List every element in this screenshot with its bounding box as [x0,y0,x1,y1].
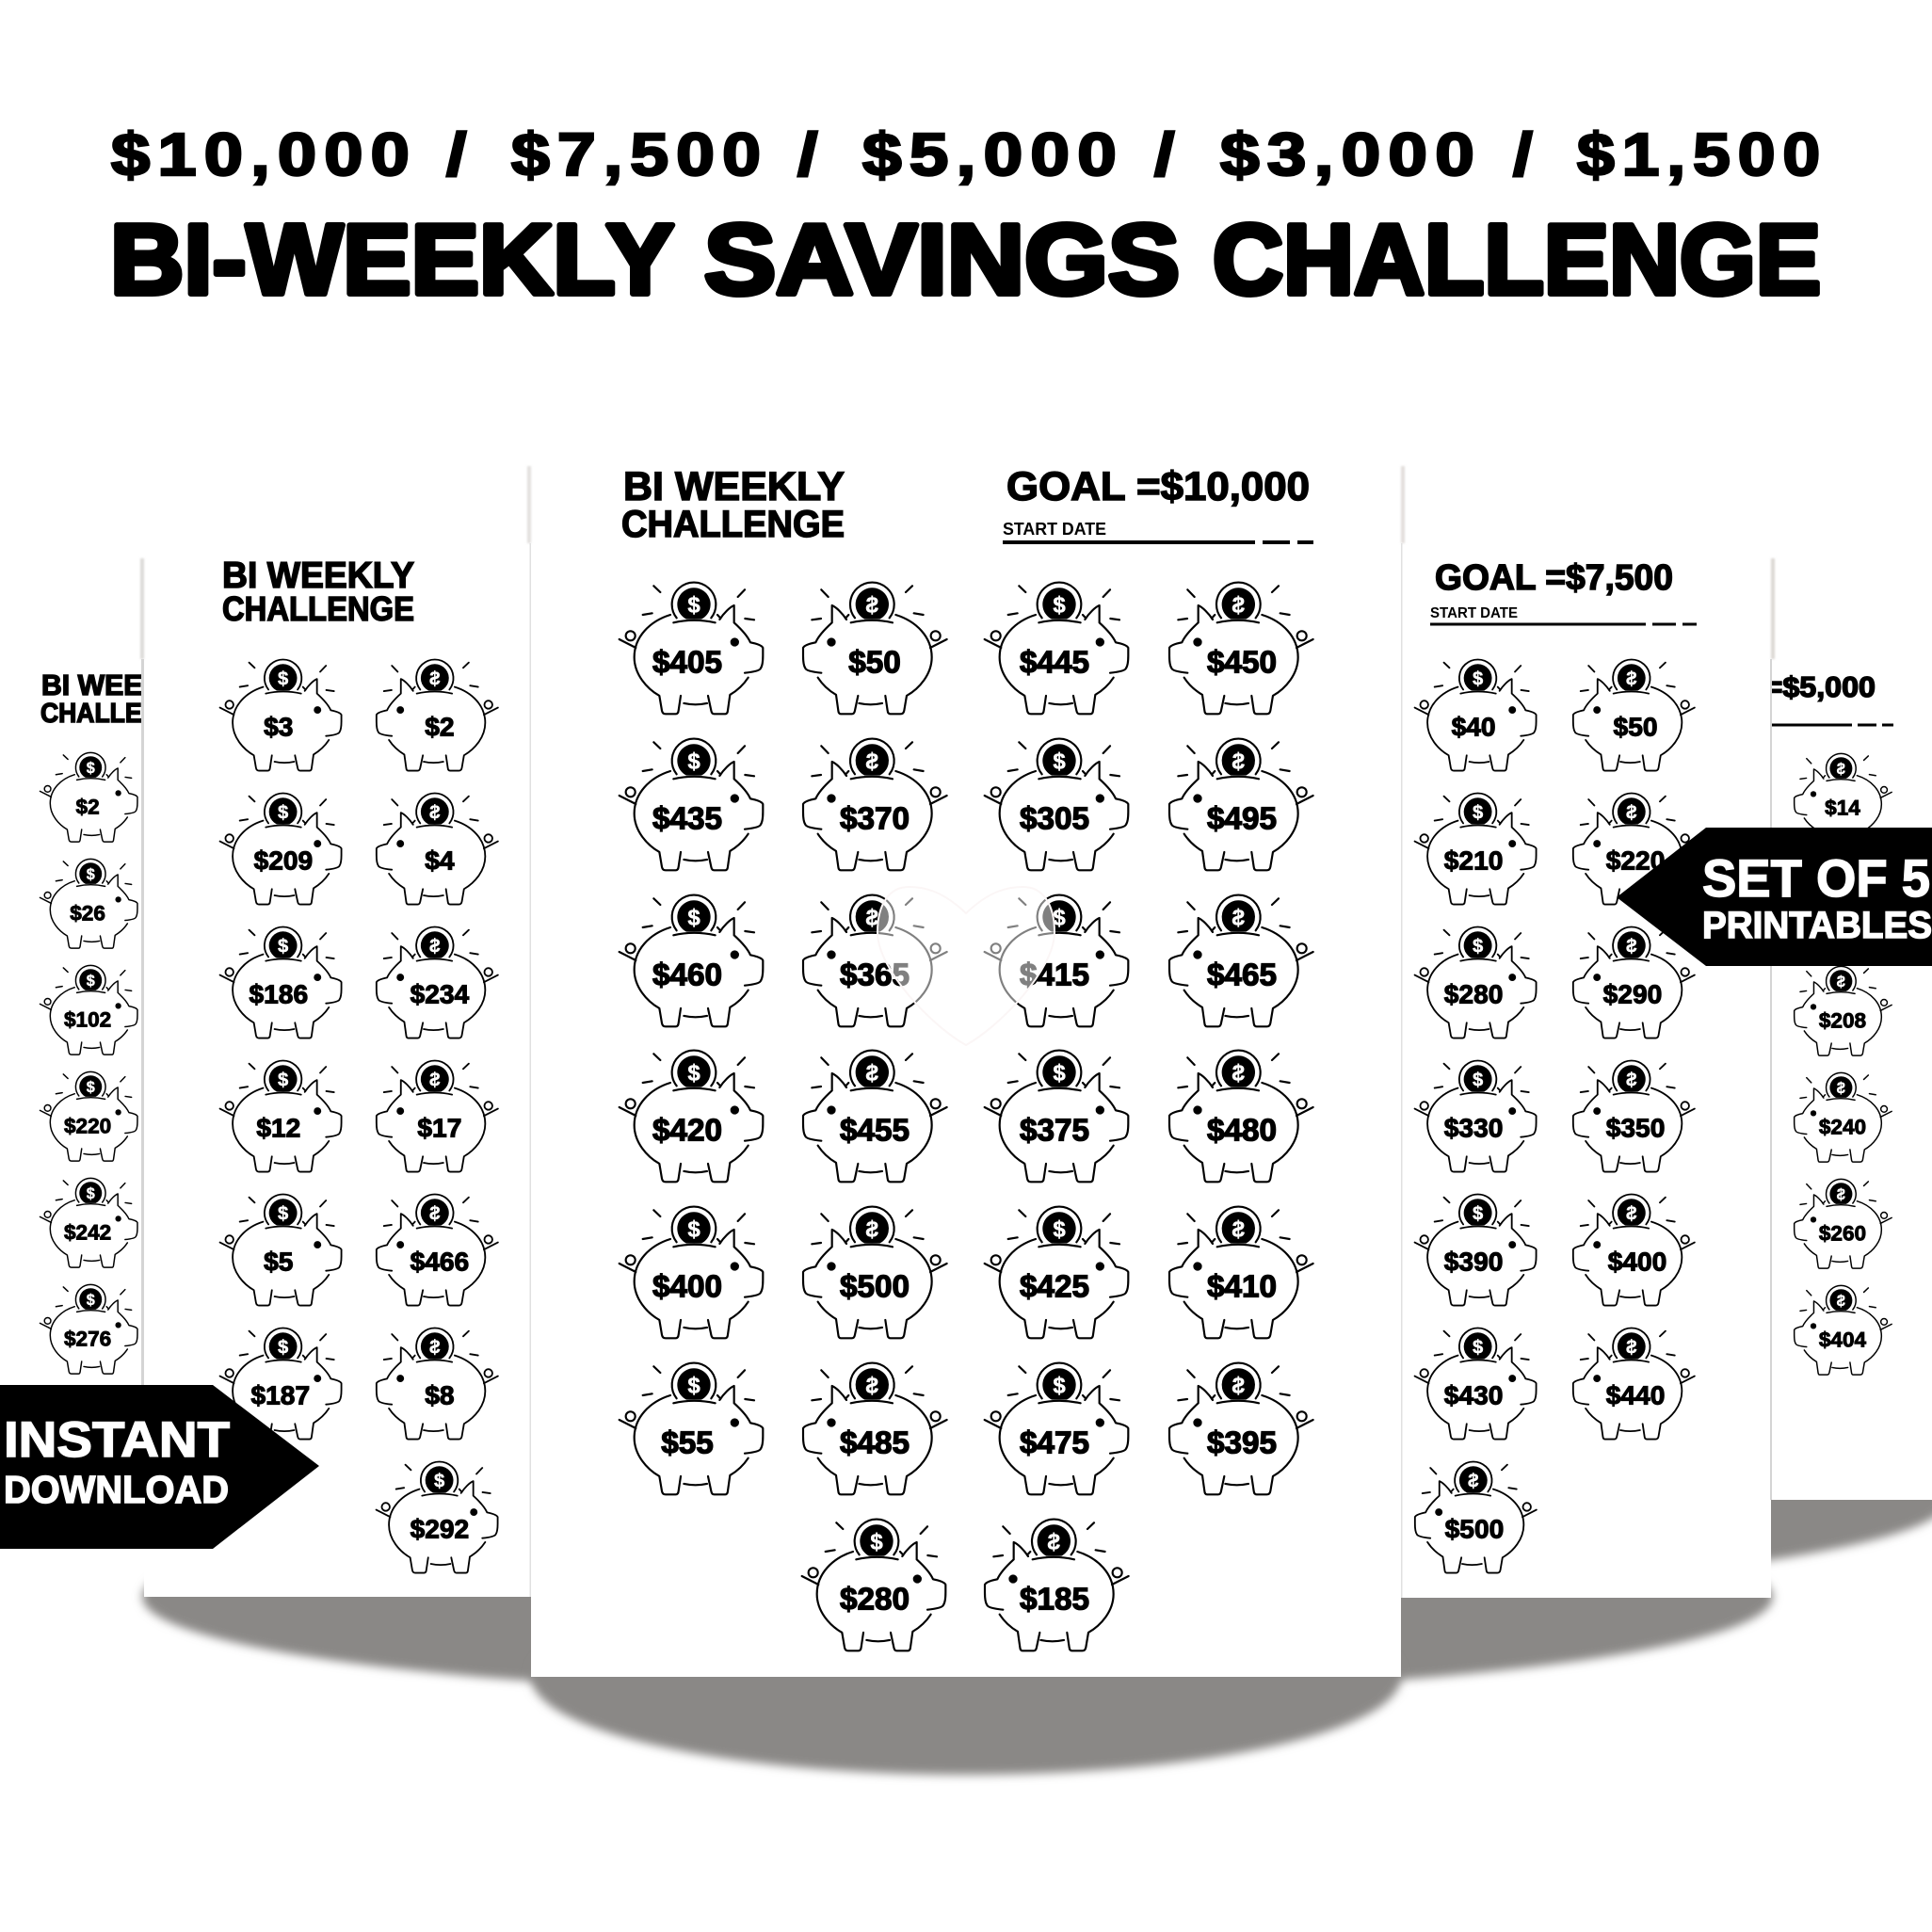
piggy $435: $435 [652,801,722,836]
piggy $365: $365 [840,958,910,992]
piggy $425 [985,1207,1128,1338]
piggy $102 [40,965,137,1055]
piggy $480 [1169,1051,1313,1182]
piggy $365 [803,895,947,1026]
rear left heading: CHALLENGE [40,699,196,729]
piggy $55: $55 [661,1426,714,1461]
piggy $415 [985,895,1128,1026]
title: BI-WEEKLY [110,204,674,315]
piggy $8: $8 [425,1381,455,1410]
panel: front sheet ($10,000) [527,464,1405,1677]
watermark: translucent heart [877,887,1055,1045]
piggy $40 [1415,659,1537,771]
piggy $404: $404 [1819,1328,1867,1352]
piggy $390: $390 [1444,1248,1503,1277]
piggy $50 [1573,659,1695,771]
piggy $220 [40,1071,137,1161]
piggy $17 [377,1060,498,1172]
front goal heading: GOAL =$10,000 [1006,464,1310,509]
piggy $26 [40,859,137,948]
piggy $495: $495 [1207,801,1277,836]
piggy $40: $40 [1452,713,1496,742]
piggy $292: $292 [411,1515,469,1544]
piggy $242: $242 [64,1221,111,1245]
piggy $410 [1169,1207,1313,1338]
piggy $55 [620,1363,763,1494]
piggy $420 [620,1051,763,1182]
piggy $8 [377,1328,498,1440]
piggy $220 [1573,793,1695,905]
piggy $209 [220,793,342,905]
shadow: middle sheets [142,1498,1773,1696]
piggy $102: $102 [64,1008,111,1032]
banner text: set of 5: SET OF 5 [1702,848,1930,908]
piggy $50: $50 [848,646,901,681]
piggy $280 [802,1520,945,1650]
piggy $208 [1795,966,1892,1055]
piggy $430 [1415,1328,1537,1440]
title: SAVINGS [704,204,1180,315]
piggy $466: $466 [411,1248,469,1277]
piggy $292 [377,1461,498,1573]
piggy $400: $400 [1608,1248,1666,1277]
piggy $500 [803,1207,947,1338]
piggy $435 [620,739,763,870]
piggy $276: $276 [64,1328,111,1351]
piggy $466 [377,1194,498,1306]
front start date: START DATE [1003,519,1106,539]
piggy $370: $370 [840,801,910,836]
piggy $430: $430 [1444,1381,1503,1410]
piggy $400 [620,1207,763,1338]
front heading [621,464,845,545]
piggy $2 [377,659,498,771]
piggy $17: $17 [417,1114,461,1143]
piggy $440 [1573,1328,1695,1440]
heading: goal amounts: / [1513,121,1540,188]
piggy $500: $500 [840,1270,910,1305]
piggy $350: $350 [1606,1114,1665,1143]
middle left heading: CHALLENGE [222,589,414,628]
piggy $260 [1795,1179,1892,1268]
panel: rear left sheet ($3,000) [0,659,197,1549]
panel: middle right sheet ($7,500) [1401,558,1775,1598]
title: CHALLENGE [1213,204,1821,315]
heading: goal amounts: $3,000 [1220,121,1482,188]
piggy $208: $208 [1819,1009,1866,1033]
piggy $400 [1573,1194,1695,1306]
piggy $240 [1795,1072,1892,1162]
piggy $185 [985,1520,1129,1650]
piggy $330: $330 [1444,1114,1503,1143]
piggy $234 [377,926,498,1038]
piggy $2 [40,752,137,842]
piggy $240: $240 [1819,1116,1866,1139]
piggy $475: $475 [1020,1426,1089,1461]
banner: instant download [0,1385,319,1549]
piggy $242 [40,1178,137,1267]
front heading: CHALLENGE [621,504,845,545]
piggy $495 [1169,739,1313,870]
middle left heading [222,555,414,628]
heading: goal amounts: $1,500 [1577,121,1827,188]
piggy $5 [220,1194,342,1306]
piggy $50 [803,583,947,714]
middle left heading: BI WEEKLY [222,555,414,596]
piggy $12: $12 [256,1114,300,1143]
panel: middle left sheet ($1,500) [140,555,531,1597]
piggy $220: $220 [64,1115,111,1138]
piggy $400: $400 [652,1270,722,1305]
piggy $395: $395 [1207,1426,1277,1461]
piggy $475 [985,1363,1128,1494]
heading: goal amounts [111,121,1827,188]
piggy $305: $305 [1020,801,1089,836]
piggy $305 [985,739,1128,870]
piggy $425: $425 [1020,1270,1089,1305]
shadow: front sheet [531,1579,1401,1775]
piggy $480: $480 [1207,1114,1277,1149]
piggy $210 [1415,793,1537,905]
banner text: instant: INSTANT [4,1412,230,1468]
heading: goal amounts: $10,000 [111,121,417,188]
piggy $209: $209 [254,846,313,876]
piggy $445: $445 [1020,646,1089,681]
front date line [1003,540,1313,544]
piggy $405 [620,583,763,714]
piggy $445 [985,583,1128,714]
piggy $455 [803,1051,947,1182]
piggy $375 [985,1051,1128,1182]
piggy $210: $210 [1444,846,1503,876]
rear left heading [40,668,197,729]
heading: goal amounts: / [1154,121,1183,188]
rear right date line [1666,723,1893,727]
piggy $280 [1415,926,1537,1038]
piggy $290 [1573,926,1695,1038]
piggy $465 [1169,895,1313,1026]
piggy $2: $2 [425,713,455,742]
piggy $186: $186 [249,980,308,1009]
banner text: download: DOWNLOAD [4,1468,229,1511]
piggy $187 [220,1328,342,1440]
piggy $4 [377,793,498,905]
piggy $415: $415 [1020,958,1089,992]
shadow: rear right sheet [1771,1500,1932,1567]
middle right start date: START DATE [1430,605,1518,621]
title [110,204,1821,315]
piggy $5: $5 [264,1248,293,1277]
piggy $390 [1415,1194,1537,1306]
piggy $440: $440 [1606,1381,1665,1410]
heading: goal amounts: $5,000 [862,121,1124,188]
piggy $14: $14 [1825,797,1860,820]
piggy $3: $3 [264,713,293,742]
piggy $375: $375 [1020,1114,1089,1149]
piggy $276 [40,1284,137,1374]
piggy $330 [1415,1060,1537,1172]
piggy $14 [1795,753,1892,843]
piggy $395 [1169,1363,1313,1494]
piggy $185: $185 [1020,1583,1089,1618]
piggy $405: $405 [652,646,722,681]
piggy $234: $234 [411,980,470,1009]
piggy $404 [1795,1285,1892,1375]
piggy $500 [1415,1461,1537,1573]
piggy $187: $187 [250,1381,310,1410]
piggy $460: $460 [652,958,722,992]
piggy $290: $290 [1603,980,1662,1009]
piggy $186 [220,926,342,1038]
middle right goal heading: GOAL =$7,500 [1435,558,1673,598]
piggy $420: $420 [652,1114,722,1149]
piggy $2: $2 [76,796,100,819]
piggy $26: $26 [70,902,105,926]
panel: rear right sheet ($5,000) [1666,659,1932,1500]
piggy $460 [620,895,763,1026]
piggy $485 [803,1363,947,1494]
piggy $450 [1169,583,1313,714]
piggy $370 [803,739,947,870]
front heading: BI WEEKLY [623,464,845,509]
piggy $410: $410 [1207,1270,1277,1305]
piggy $450: $450 [1207,646,1277,681]
piggy $455: $455 [840,1114,910,1149]
piggy $4: $4 [425,846,455,876]
middle right date line [1430,623,1697,625]
heading: goal amounts: $7,500 [511,121,768,188]
piggy $12 [220,1060,342,1172]
piggy $260: $260 [1819,1222,1866,1246]
piggy $3 [220,659,342,771]
piggy $350 [1573,1060,1695,1172]
piggy $280: $280 [840,1583,910,1618]
piggy $500: $500 [1445,1515,1504,1544]
piggy $465: $465 [1207,958,1277,992]
rear left heading: BI WEEKLY [41,668,197,701]
rear right goal heading: GOAL =$5,000 [1669,670,1876,703]
piggy $50: $50 [1614,713,1658,742]
banner: set of 5 printables [1617,828,1932,966]
heading: goal amounts: / [797,121,826,188]
piggy $220: $220 [1606,846,1665,876]
piggy $485: $485 [840,1426,910,1461]
heading: goal amounts: / [446,121,475,188]
piggy $280: $280 [1444,980,1503,1009]
